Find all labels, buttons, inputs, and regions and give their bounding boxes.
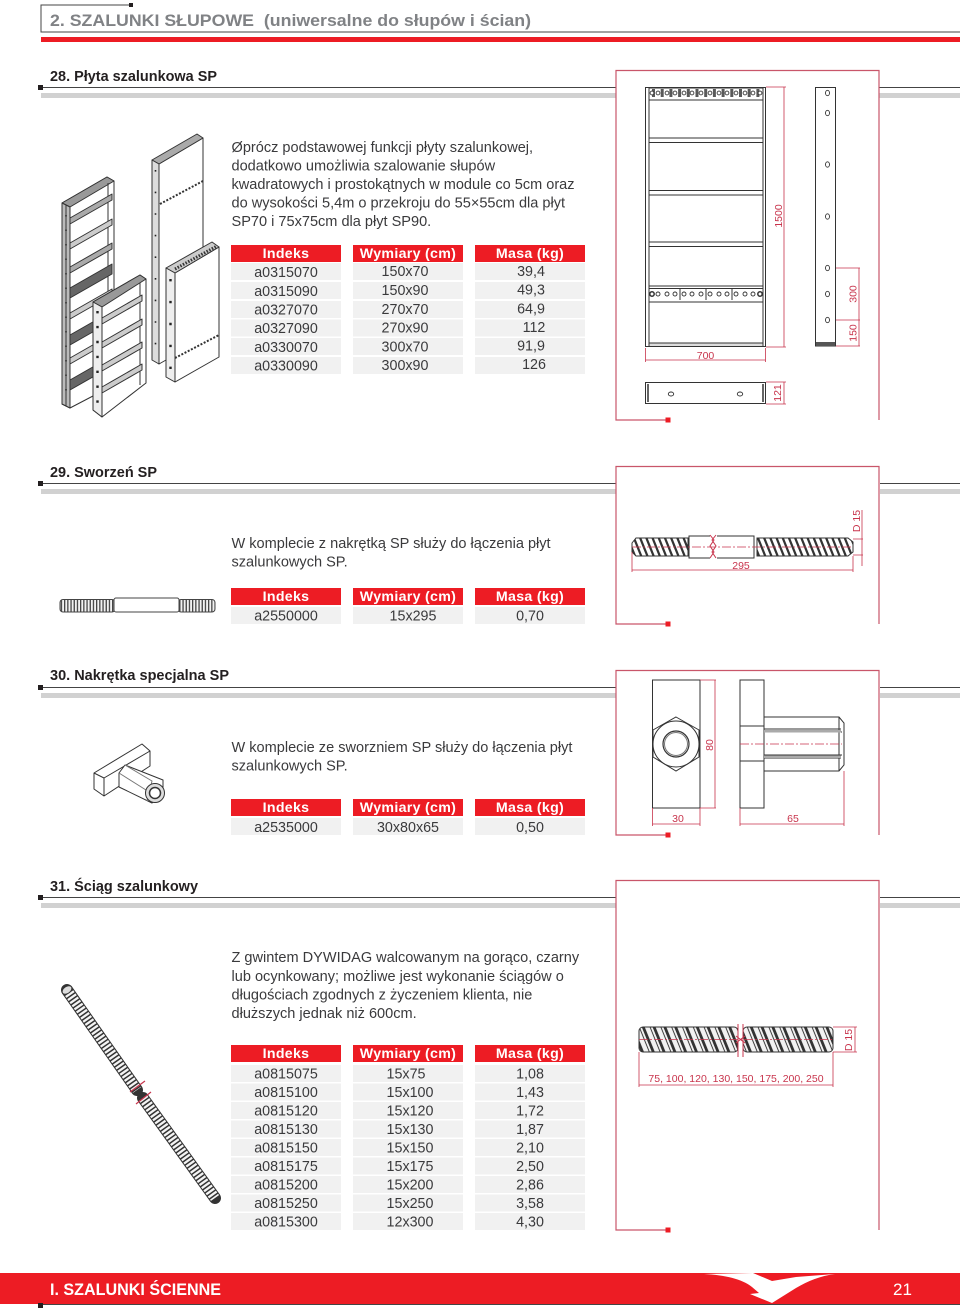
description 30 (232, 740, 572, 774)
table 31: 15x250 (387, 1196, 434, 1212)
table 31: a0815175 (254, 1159, 318, 1175)
drawing panel 31 (616, 880, 879, 1232)
table 31: Indeks (263, 1046, 309, 1062)
table 30: a2535000 (254, 820, 318, 836)
bolt dimensions: 295 (732, 560, 750, 572)
table 31: a0815130 (254, 1122, 318, 1138)
footer title: I. SZALUNKI ŚCIENNE (50, 1280, 221, 1299)
table 30: Masa (kg) (496, 800, 564, 816)
description 29: szalunkowych SP. (232, 554, 348, 570)
table 28: 112 (523, 320, 545, 336)
table 31: 15x150 (387, 1140, 434, 1156)
description 28: do wysokości 5,4m o przekroju do 55×55cm dla płyt (232, 196, 565, 212)
table 31: 1,72 (516, 1104, 544, 1120)
table 28: a0330090 (254, 358, 318, 374)
illustration: special nut (94, 744, 164, 803)
description 31: długościach zgodnych z życzeniem klienta, nie (232, 988, 532, 1004)
table 28: 39,4 (517, 264, 545, 280)
rod dimensions (639, 1027, 857, 1087)
table 31: 2,50 (516, 1159, 544, 1175)
table 31: 2,10 (516, 1140, 544, 1156)
section heading 29: 29. Sworzeń SP (50, 465, 157, 481)
drawing panel 28 (616, 70, 879, 422)
description 28 (232, 140, 574, 230)
section heading 31 (38, 877, 960, 908)
table 31: 15x130 (387, 1122, 434, 1138)
table 28: 91,9 (517, 338, 545, 354)
description 28: SP70 i 75x75cm dla płyt SP90. (232, 214, 431, 230)
section heading 28 (38, 69, 960, 98)
table 28: 49,3 (517, 282, 545, 298)
table 29: Indeks (263, 589, 309, 605)
table 31: a0815150 (254, 1140, 318, 1156)
large frame panel (62, 177, 114, 408)
table 29: 0,70 (516, 608, 544, 624)
table 28: 64,9 (517, 302, 545, 318)
table 28: 270x90 (382, 320, 429, 336)
tall sheet panel (152, 134, 203, 364)
description 28: Øprócz podstawowej funkcji płyty szalunkowej, (232, 140, 533, 156)
table 28: Wymiary (cm) (360, 246, 456, 262)
rod drawing (639, 1024, 833, 1057)
description 28: dodatkowo umożliwia szalowanie słupów (232, 158, 496, 174)
bottom view (646, 382, 766, 404)
table 30: 0,50 (516, 820, 544, 836)
dimensions: 150 (848, 324, 860, 342)
table 28: a0315090 (254, 284, 318, 300)
table 31: a0815100 (254, 1085, 318, 1101)
chapter header (41, 3, 960, 42)
red header bar (41, 37, 960, 42)
page number: 21 (893, 1280, 912, 1299)
drawing panel 30 (616, 670, 879, 838)
footer bar (0, 1273, 960, 1308)
short sheet panel (166, 242, 219, 382)
description 30: szalunkowych SP. (232, 758, 348, 774)
section heading 31: 31. Ściąg szalunkowy (50, 877, 198, 895)
table 30 (231, 799, 585, 836)
table 31: 2,86 (516, 1178, 544, 1194)
table 29 (231, 588, 585, 624)
table 31: a0815250 (254, 1196, 318, 1212)
table 31: 3,58 (516, 1196, 544, 1212)
description 28: kwadratowych i prostokątnych w module co 5cm oraz (232, 177, 574, 193)
logo: white bird (704, 1273, 835, 1303)
table 29: Masa (kg) (496, 589, 564, 605)
table 31: 15x100 (387, 1085, 434, 1101)
table 31: 15x200 (387, 1178, 434, 1194)
table 31: 12x300 (387, 1214, 434, 1230)
table 28: 270x70 (382, 302, 429, 318)
table 29: a2550000 (254, 608, 318, 624)
front view (646, 88, 766, 346)
illustration: formwork panels (62, 134, 219, 417)
table 28: a0315070 (254, 265, 318, 281)
description 31: lub ocynkowany; możliwe jest wykonanie ściągów o (232, 969, 564, 985)
table 28: a0327090 (254, 321, 318, 337)
table 28 (231, 245, 585, 374)
table 31: 15x120 (387, 1104, 434, 1120)
section heading 30: 30. Nakrętka specjalna SP (50, 668, 229, 684)
table 31: 1,87 (516, 1122, 544, 1138)
nut dimensions: 30 (672, 813, 684, 825)
description 31: Z gwintem DYWIDAG walcowanym na gorąco, czarny (232, 950, 580, 966)
description 29 (232, 536, 551, 570)
table 30: Wymiary (cm) (360, 800, 456, 816)
nut dimensions: 80 (704, 739, 716, 751)
table 29: Wymiary (cm) (360, 589, 456, 605)
description 31: dłuższych jednak niż 600cm. (232, 1006, 417, 1022)
table 28: Masa (kg) (496, 246, 564, 262)
table 31: a0815200 (254, 1178, 318, 1194)
section heading 28: 28. Płyta szalunkowa SP (50, 69, 217, 85)
illustration: tie rod (60, 984, 215, 1198)
rod dimensions: 75, 100, 120, 130, 150, 175, 200, 250 (648, 1073, 824, 1085)
table 28: 150x90 (382, 283, 429, 299)
table 31: a0815075 (254, 1066, 318, 1082)
table 28: Indeks (263, 246, 309, 262)
table 28: 300x90 (382, 358, 429, 374)
description 29: W komplecie z nakrętką SP służy do łączenia płyt (232, 536, 551, 552)
nut dimensions: 65 (787, 813, 799, 825)
dimensions: 300 (848, 285, 860, 303)
chapter title: 2. SZALUNKI SŁUPOWE (uniwersalne do słupów i ścian) (50, 12, 531, 30)
nut dimensions (652, 680, 844, 826)
dimensions: 1500 (773, 204, 785, 228)
illustration: bolt (60, 598, 215, 612)
table 31 (231, 1045, 585, 1230)
description 31 (232, 950, 580, 1022)
bolt dimensions (632, 510, 863, 572)
table 31: a0815300 (254, 1214, 318, 1230)
table 28: 150x70 (382, 264, 429, 280)
drawing panel 29 (616, 466, 879, 626)
bolt dimensions: D 15 (851, 510, 863, 532)
dimensions (646, 87, 860, 404)
dimensions: 121 (772, 384, 784, 402)
table 30: Indeks (263, 800, 309, 816)
dimensions: 700 (697, 350, 714, 362)
table 29: 15x295 (390, 608, 437, 624)
table 30: 30x80x65 (377, 820, 439, 836)
small frame panel (93, 275, 146, 417)
bolt drawing (632, 534, 853, 560)
table 31: 1,43 (516, 1085, 544, 1101)
table 28: a0330070 (254, 340, 318, 356)
table 28: a0327070 (254, 302, 318, 318)
table 31: 15x75 (387, 1066, 426, 1082)
table 31: 15x175 (387, 1159, 434, 1175)
side view (816, 88, 836, 346)
nut side view (740, 680, 844, 808)
table 31: Masa (kg) (496, 1046, 564, 1062)
nut front view (652, 680, 700, 808)
table 28: 126 (522, 357, 546, 373)
section heading 30 (38, 668, 960, 698)
table 28: 300x70 (382, 340, 429, 356)
table 31: a0815120 (254, 1104, 318, 1120)
table 31: Wymiary (cm) (360, 1046, 456, 1062)
table 31: 1,08 (516, 1066, 544, 1082)
section heading 29 (38, 465, 960, 494)
description 30: W komplecie ze sworzniem SP służy do łączenia płyt (232, 740, 572, 756)
rod dimensions: D 15 (843, 1029, 855, 1051)
table 31: 4,30 (516, 1214, 544, 1230)
